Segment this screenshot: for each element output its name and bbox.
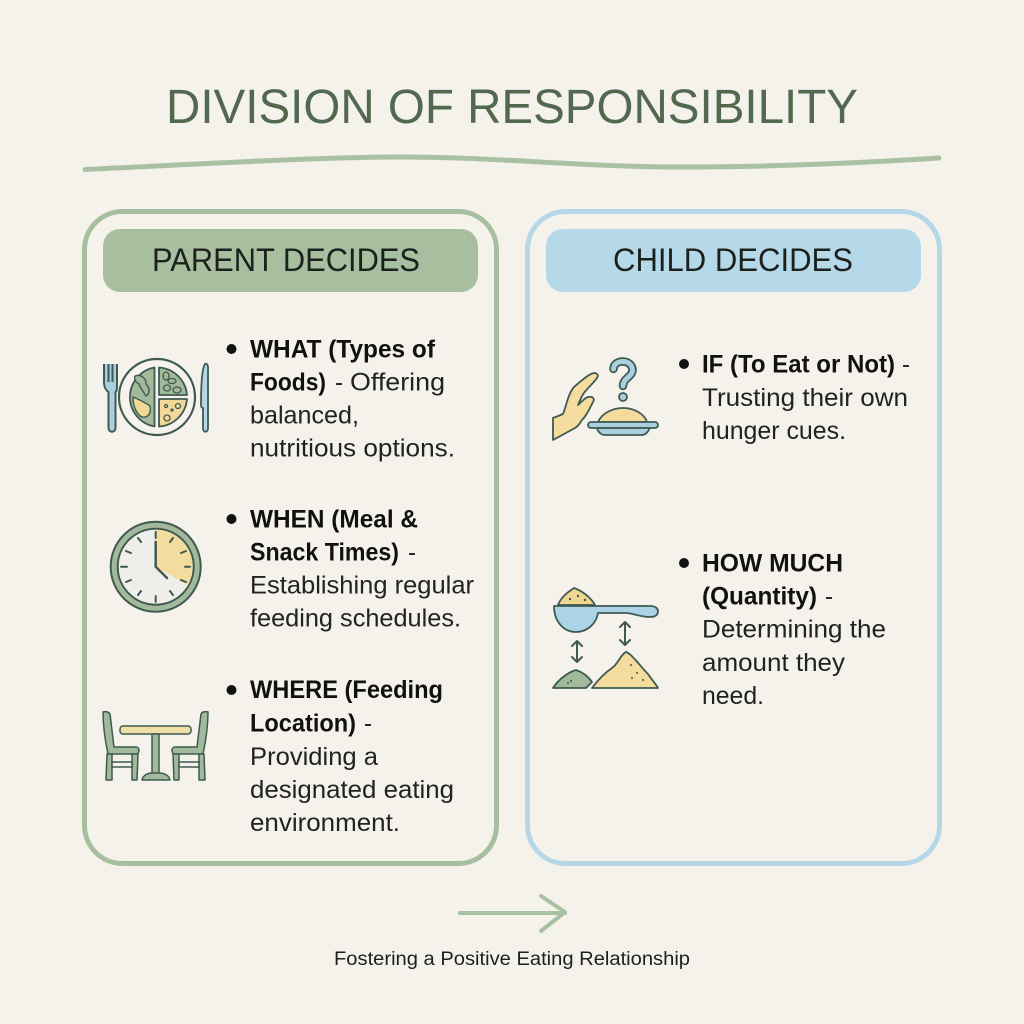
text: what: Offering [350,368,445,396]
parent header: PARENT DECIDES [152,242,420,278]
text: where [226,676,454,837]
text: what: - [335,368,343,396]
text: how much: HOW MUCH [702,550,843,578]
text: how much: need. [702,682,764,710]
text: if: IF (To Eat or Not) [702,350,895,378]
arrow [460,896,565,931]
footer caption: Fostering a Positive Eating Relationship [334,949,690,970]
text: where: WHERE (Feeding [250,676,443,704]
text: if: Trusting their own [702,384,908,412]
title underline [85,157,939,170]
text: what: nutritious options. [250,434,455,462]
icon: clock [111,522,201,612]
text: if [679,350,910,445]
text: what [226,336,455,462]
icon: table and chairs [103,712,208,780]
title: DIVISION OF RESPONSIBILITY [166,81,858,134]
text: where: Location) [250,710,356,738]
text: when: WHEN (Meal & [250,506,418,534]
icon: hand, question mark and dish [553,362,658,440]
text: how much [679,550,886,710]
text: how much: amount they [702,649,846,677]
text: if: hunger cues. [702,417,846,445]
panel: parent decides [84,212,496,864]
parent header [103,229,478,292]
text: if: - [902,350,910,378]
text: where: designated eating [250,776,454,804]
text: what: Foods) [250,368,326,396]
text: where: environment. [250,809,400,837]
child header [546,229,921,292]
icon: scoop and piles [553,588,658,688]
icon: plate with fork and knife [104,359,208,435]
child header: CHILD DECIDES [613,242,853,278]
text: how much: (Quantity) [702,582,817,610]
text: when [226,506,474,632]
text: when: feeding schedules. [250,604,461,632]
text: where: Providing a [250,743,378,771]
text: when: Establishing regular [250,572,474,600]
text: what: balanced, [250,402,359,430]
text: when: Snack Times) [250,538,399,566]
text: how much: Determining the [702,616,886,644]
text: how much: - [825,582,833,610]
text: what: WHAT (Types of [250,336,436,364]
panel: child decides [528,212,940,864]
text: when: - [408,538,416,566]
text: where: - [364,710,372,738]
